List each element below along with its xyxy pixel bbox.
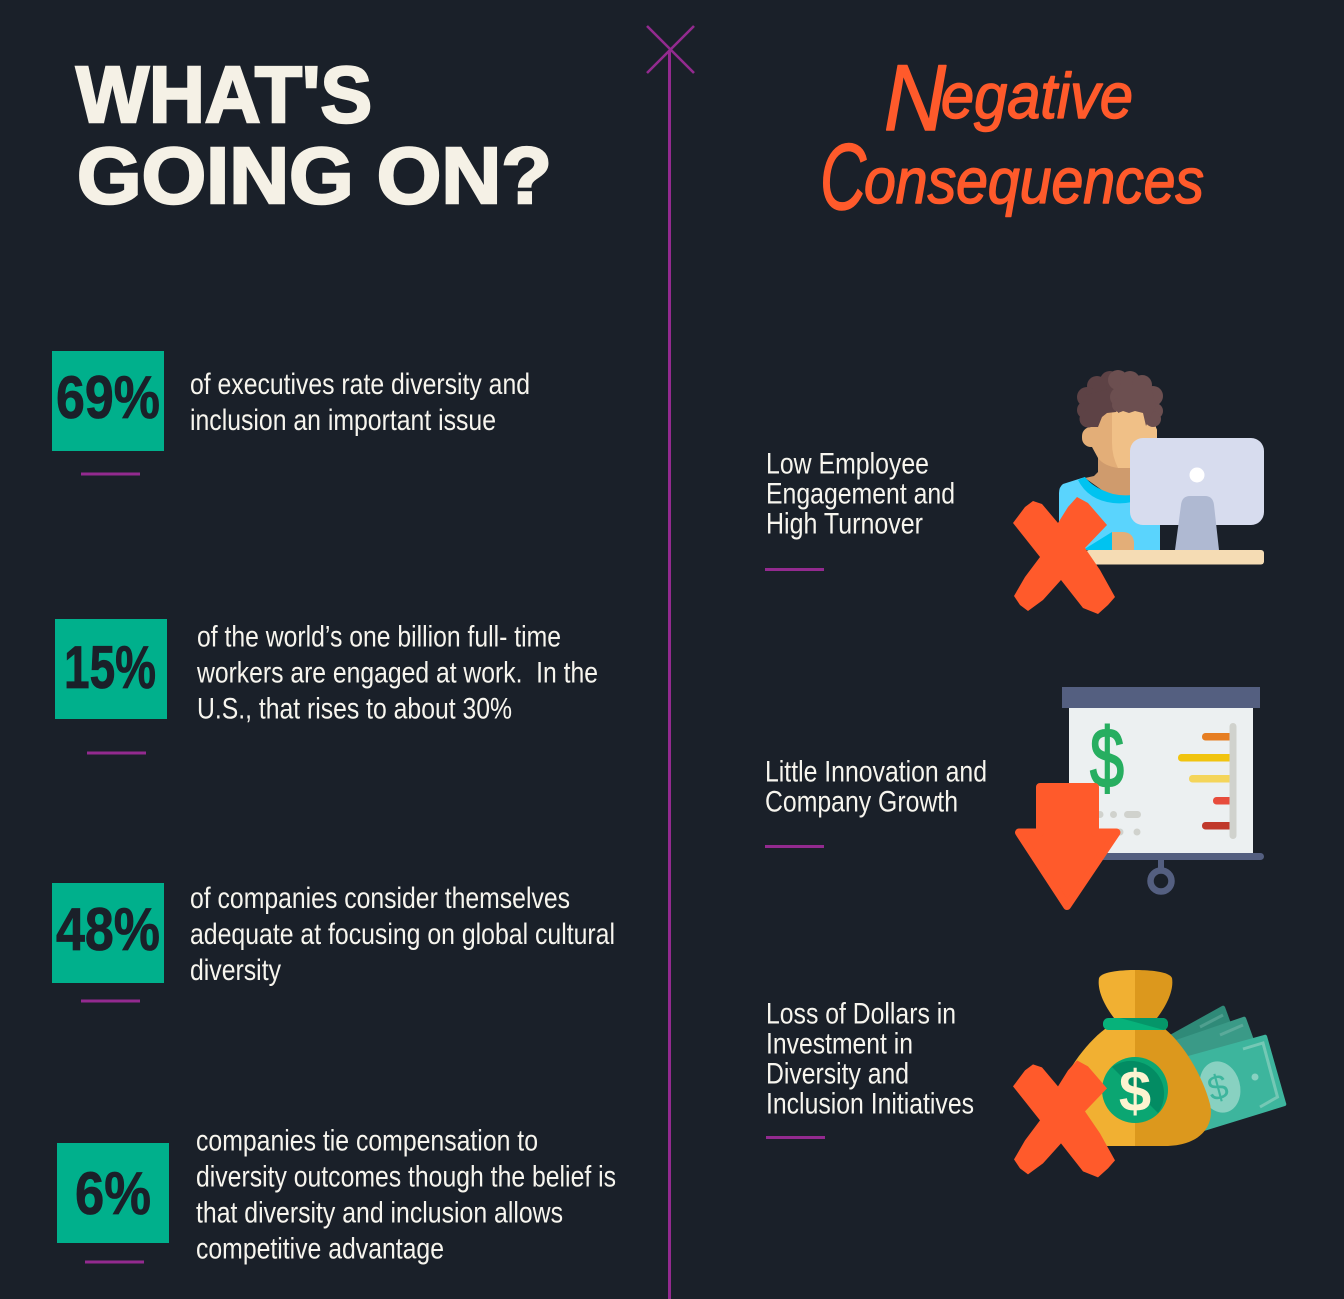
neck xyxy=(1085,455,1133,498)
heading: Negative Consequences: egative xyxy=(941,60,1133,132)
heading: Negative Consequences xyxy=(820,45,1204,229)
stat text 15%: of the world’s one billion full- time xyxy=(197,620,561,654)
money bag xyxy=(1099,970,1135,1018)
consequence text: little innovation xyxy=(765,756,987,848)
panel: stat 48% xyxy=(52,882,615,1002)
monitor xyxy=(1130,438,1264,525)
dollar sign on board: $ xyxy=(1090,711,1124,805)
stat box 48% xyxy=(52,883,164,983)
stat text 48% xyxy=(190,882,615,987)
consequence text: loss of dollars: Investment in xyxy=(766,1028,913,1061)
stat text 69% xyxy=(190,368,530,437)
consequence text: loss of dollars: Diversity and xyxy=(766,1058,909,1091)
stat box 69% xyxy=(52,351,164,451)
consequence text: loss of dollars: Loss of Dollars in xyxy=(766,998,956,1031)
consequence text: low engagement: Engagement and xyxy=(766,478,955,511)
banknotes: $ xyxy=(1203,1066,1232,1109)
heading: Negative Consequences: N xyxy=(884,45,946,150)
consequence text: little innovation: Little Innovation and xyxy=(765,756,987,789)
stat text 48%: adequate at focusing on global cultural xyxy=(190,918,615,951)
consequence text: low engagement: High Turnover xyxy=(766,508,923,541)
stat text 48%: diversity xyxy=(190,954,281,987)
stat box 48%: 48% xyxy=(56,896,160,963)
heading: What's Going On?: GOING ON? xyxy=(77,131,552,220)
consequence text: little innovation: Company Growth xyxy=(765,786,958,819)
red X xyxy=(1013,497,1115,614)
bar chart on board xyxy=(1178,723,1236,839)
stat text 48%: of companies consider themselves xyxy=(190,882,570,915)
consequence text: loss of dollars xyxy=(766,998,974,1139)
stat text 69%: inclusion an important issue xyxy=(190,404,496,437)
stat box 6%: 6% xyxy=(75,1160,151,1227)
stat box 6% xyxy=(57,1143,169,1243)
stat text 6%: that diversity and inclusion allows xyxy=(196,1196,563,1230)
consequence text: low engagement: Low Employee xyxy=(766,448,929,481)
stat text 6% xyxy=(196,1124,616,1266)
stat box 15% xyxy=(55,619,167,719)
central divider with crossed lines xyxy=(647,26,694,1299)
red X xyxy=(1013,1060,1115,1177)
stat text 69%: of executives rate diversity and xyxy=(190,368,530,401)
heading: What's Going On? xyxy=(76,50,552,220)
stat text 15%: U.S., that rises to about 30% xyxy=(197,692,512,726)
consequence text: loss of dollars: Inclusion Initiatives xyxy=(766,1088,974,1121)
stat box 69%: 69% xyxy=(56,364,160,431)
icon: presentation board with down arrow xyxy=(1019,687,1264,906)
panel: stat 15% xyxy=(55,619,598,754)
icon: person at computer with red X xyxy=(1013,370,1264,614)
stat text 6%: competitive advantage xyxy=(196,1232,444,1266)
panel: stat 69% xyxy=(52,351,530,476)
consequence text: low engagement xyxy=(765,448,955,571)
stat text 15%: workers are engaged at work. In the xyxy=(196,656,598,690)
heading: What's Going On?: WHAT'S xyxy=(76,50,372,139)
heading: Negative Consequences: onsequences xyxy=(864,145,1204,217)
icon: money bag and banknotes with red X: $ xyxy=(1119,1059,1151,1124)
face xyxy=(1082,405,1157,468)
shirt xyxy=(1059,477,1160,550)
stat text 6%: companies tie compensation to xyxy=(196,1124,538,1158)
hair xyxy=(1077,370,1163,428)
heading: Negative Consequences: C xyxy=(820,124,867,229)
icon: money bag and banknotes with red X xyxy=(1013,970,1286,1177)
stat box 15%: 15% xyxy=(64,634,156,701)
panel: stat 6% xyxy=(57,1124,616,1266)
stat text 6%: diversity outcomes though the belief is xyxy=(196,1160,616,1194)
stat text 15% xyxy=(196,620,598,726)
banknotes xyxy=(1168,1006,1286,1131)
